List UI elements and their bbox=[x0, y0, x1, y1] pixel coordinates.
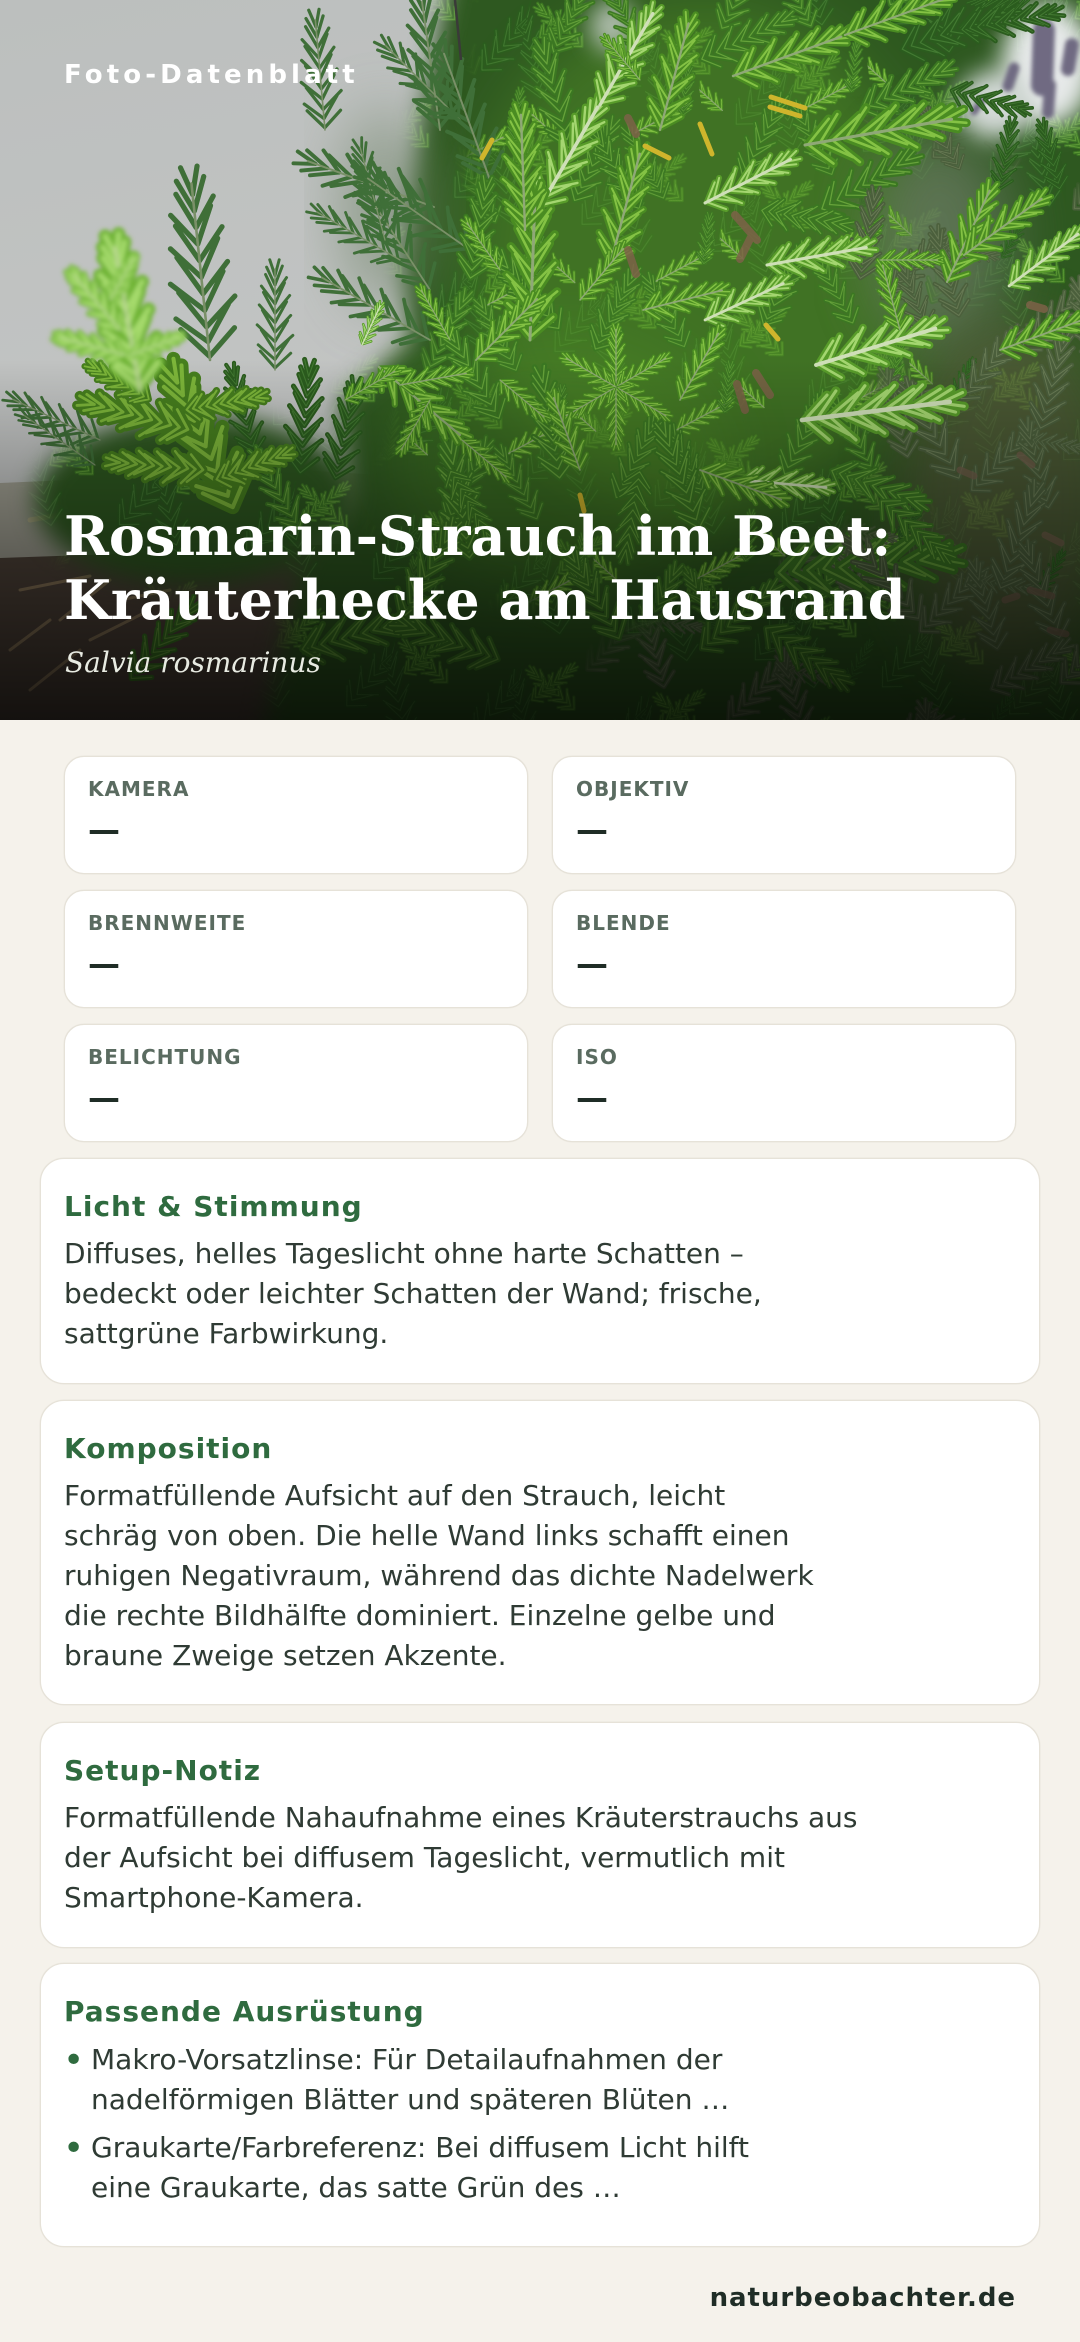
bright left plant bbox=[51, 230, 299, 518]
panel: Passende Ausrüstung: eine Graukarte, das satte Grün des … bbox=[91, 2171, 621, 2204]
panel: Setup-Notiz: der Aufsicht bei diffusem Tageslicht, vermutlich mit bbox=[64, 1841, 785, 1874]
meta card: Belichtung bbox=[64, 1024, 528, 1142]
panel: Passende Ausrüstung: • bbox=[63, 2040, 84, 2081]
hero subtitle: Salvia rosmarinus bbox=[65, 646, 321, 679]
panel: Setup-Notiz bbox=[40, 1722, 1040, 1948]
meta card: Kamera: — bbox=[88, 811, 120, 849]
meta card: ISO: — bbox=[576, 1079, 608, 1117]
hero title: Kräuterhecke am Hausrand bbox=[64, 568, 906, 632]
meta card: Belichtung: — bbox=[88, 1079, 120, 1117]
meta card: Kamera bbox=[64, 756, 528, 874]
pale background gaps and tonal glow bbox=[340, 0, 1080, 680]
panel: Passende Ausrüstung: nadelförmigen Blätter und späteren Blüten … bbox=[91, 2083, 729, 2116]
meta card: Blende: — bbox=[576, 945, 608, 983]
meta card: Blende bbox=[552, 890, 1016, 1008]
panel: Komposition: die rechte Bildhälfte dominiert. Einzelne gelbe und bbox=[64, 1599, 775, 1632]
bright foreground sprigs bbox=[340, 0, 1080, 517]
wall bbox=[0, 0, 1080, 720]
panel: Passende Ausrüstung: Graukarte/Farbreferenz: Bei diffusem Licht hilft bbox=[91, 2131, 749, 2164]
dull lower right foliage texture bbox=[587, 116, 1080, 720]
foliage mass bbox=[0, 0, 1080, 720]
yellow leaves and brown seed heads bbox=[482, 97, 1066, 634]
thin dark sprigs on the wall bbox=[0, 0, 512, 482]
lavender spikes bbox=[974, 30, 1072, 113]
mid-tone sprigs bbox=[118, 0, 1080, 702]
meta card: Brennweite bbox=[64, 890, 528, 1008]
concrete ledge and ground bbox=[0, 470, 380, 562]
meta card: ISO: ISO bbox=[576, 1045, 618, 1069]
panel: Licht & Stimmung: sattgrüne Farbwirkung. bbox=[64, 1317, 388, 1350]
panel: Komposition: schräg von oben. Die helle Wand links schafft einen bbox=[64, 1519, 789, 1552]
meta card: Objektiv: — bbox=[576, 811, 608, 849]
panel: Licht & Stimmung: bedeckt oder leichter Schatten der Wand; frische, bbox=[64, 1277, 762, 1310]
panel: Licht & Stimmung: Diffuses, helles Tageslicht ohne harte Schatten – bbox=[64, 1237, 744, 1270]
meta card: Brennweite: BRENNWEITE bbox=[88, 911, 246, 935]
panel: Passende Ausrüstung bbox=[40, 1963, 1040, 2247]
meta card: Objektiv: OBJEKTIV bbox=[576, 777, 689, 801]
panel: Komposition: Komposition bbox=[64, 1432, 272, 1465]
panel: Licht & Stimmung bbox=[40, 1158, 1040, 1384]
panel: Setup-Notiz: Setup-Notiz bbox=[64, 1754, 261, 1787]
panel: Komposition bbox=[40, 1400, 1040, 1705]
meta card: Brennweite: — bbox=[88, 945, 120, 983]
panel: Komposition: braune Zweige setzen Akzente. bbox=[64, 1639, 507, 1672]
footer brand: naturbeobachter.de bbox=[710, 2283, 1016, 2313]
panel: Komposition: Formatfüllende Aufsicht auf den Strauch, leicht bbox=[64, 1479, 725, 1512]
hero panel bbox=[0, 0, 1080, 720]
hero kicker label: Foto-Datenblatt bbox=[64, 60, 359, 90]
hero photo: rosemary shrub at house wall bbox=[0, 0, 1080, 720]
hero title: Rosmarin-Strauch im Beet: bbox=[64, 504, 891, 568]
meta card: Blende: BLENDE bbox=[576, 911, 671, 935]
panel: Setup-Notiz: Smartphone-Kamera. bbox=[64, 1881, 364, 1914]
meta card: Belichtung: BELICHTUNG bbox=[88, 1045, 242, 1069]
panel: Passende Ausrüstung: • bbox=[63, 2128, 84, 2169]
panel: Licht & Stimmung: Licht & Stimmung bbox=[64, 1190, 363, 1223]
meta card: ISO bbox=[552, 1024, 1016, 1142]
hero title bbox=[64, 504, 906, 632]
panel: Passende Ausrüstung: Makro-Vorsatzlinse: Für Detailaufnahmen der bbox=[91, 2043, 722, 2076]
meta card: Kamera: KAMERA bbox=[88, 777, 189, 801]
dense mid foliage texture bbox=[390, 0, 938, 628]
panel: Passende Ausrüstung: Passende Ausrüstung bbox=[64, 1995, 425, 2028]
panel: Komposition: ruhigen Negativraum, während das dichte Nadelwerk bbox=[64, 1559, 814, 1592]
hero dark gradient overlay bbox=[0, 0, 1080, 720]
meta card: Objektiv bbox=[552, 756, 1016, 874]
panel: Setup-Notiz: Formatfüllende Nahaufnahme eines Kräuterstrauchs aus bbox=[64, 1801, 857, 1834]
